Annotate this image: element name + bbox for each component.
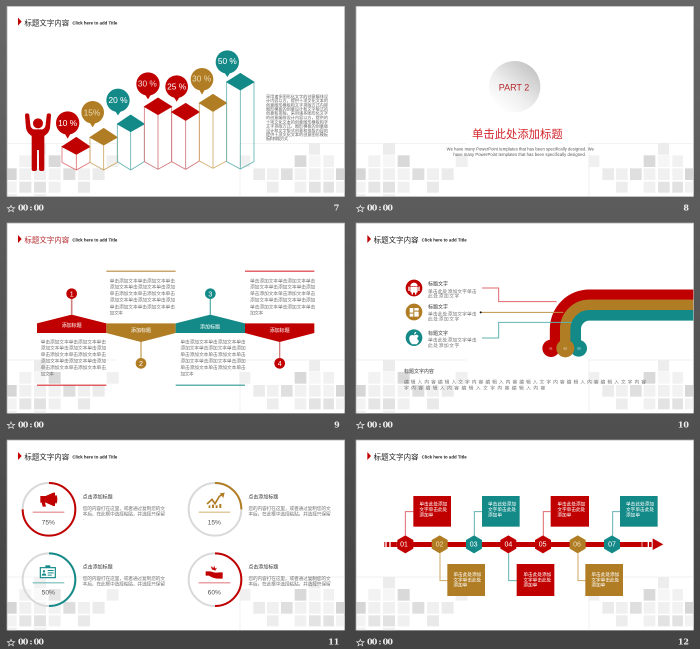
footer timer: 00 : 00 (18, 419, 44, 429)
box 02: 添加单 (453, 582, 468, 589)
description 1: 点击添加标题 (83, 493, 113, 500)
box 06: 添加单 (591, 582, 606, 589)
bubble 20%: 20 % (109, 95, 128, 105)
circle badge (489, 61, 540, 112)
bar 15% (90, 128, 117, 170)
slide heading: Click here to add Title (72, 455, 118, 460)
connector teal (482, 322, 572, 338)
footer timer: 00 : 00 (367, 202, 393, 212)
item 2 text: 标题文字 (428, 304, 448, 311)
box 02: 文字单击此处 (453, 576, 482, 583)
bubble 10% (56, 111, 79, 139)
hexagon 07 (604, 535, 620, 553)
bar 30% gold (199, 94, 227, 168)
rule red bottom (37, 385, 106, 386)
text block 4: 单击添加文本单击添加文本单击 (250, 290, 316, 297)
text block 2 (110, 277, 175, 317)
bubble 25%: 25 % (167, 81, 187, 91)
text block 1: 单击添加文本单击添加文本单击 (41, 338, 106, 345)
bubble 30% (136, 72, 160, 99)
ring label 75%: 75% (42, 520, 55, 527)
ring label 60%: 60% (208, 590, 221, 597)
text block: 提供十项文化文本的创意图形模板 (266, 131, 328, 137)
node 03: 03 (577, 346, 581, 350)
slide card (356, 6, 694, 197)
footer timer: 00 : 00 (18, 637, 44, 647)
text block 1: 添加文本单击添加文本单击添加 (41, 357, 106, 364)
text block 4 (250, 277, 316, 317)
text block 4: 添加文本单击添加文本单击添加 (250, 297, 316, 304)
panel: slide 7 bar chart (7, 6, 345, 212)
box 04: 单击此处添加 (523, 571, 552, 578)
bar 20% (117, 115, 144, 170)
footer timer: 00 : 00 (18, 202, 44, 212)
page number: 8 (683, 202, 689, 212)
section title: 单击此处添加标题 (472, 127, 563, 141)
box 07 (620, 496, 658, 527)
bubble 20% (106, 89, 130, 115)
node 02: 02 (564, 346, 567, 350)
marker 3 (205, 288, 216, 315)
text block 4: 单击添加文本单击添加文本单击 (250, 277, 316, 284)
ribbon segment 4 (245, 323, 314, 342)
text block 3: 添加文本单击添加文本单击添加 (180, 345, 246, 352)
isometric bar chart (62, 73, 254, 170)
text block 2: 添加文本单击添加文本单击添加 (110, 284, 175, 291)
text block 1: 添加文本单击添加文本单击添加 (41, 345, 106, 352)
timeline arrow (384, 538, 663, 550)
text block 3: 加文本 (180, 371, 194, 378)
marker 1: 1 (70, 291, 74, 298)
text block 3 (180, 338, 246, 378)
band teal (576, 315, 693, 348)
band gold (565, 305, 693, 348)
hexagon 04 (500, 535, 516, 553)
box 07: 添加单 (626, 511, 640, 518)
text block 4: 加文本 (250, 310, 264, 317)
text block 4: 单击添加文本单击添加文本单击 (250, 303, 316, 310)
panel: slide 9 pentagon process (7, 223, 345, 429)
bar 30% (144, 98, 172, 169)
subtitle text: We have many PowerPoint templates that has been specifically designed. We (447, 147, 595, 152)
box 01: 添加单 (419, 511, 434, 518)
ribbon segment 3 (176, 315, 245, 333)
description 4: 您的内容打在这里，或者通过复制您的文 (248, 575, 331, 582)
icon: person with raised arms (25, 113, 51, 171)
bubble 50% (216, 50, 239, 77)
item 1 text: 此处添加文字 (428, 293, 460, 300)
item 3 text: 单击此处添加文字单击 (428, 337, 477, 344)
slide heading: 标题文字内容 (24, 452, 70, 462)
panel: slide 11 progress rings (7, 440, 345, 647)
band red (555, 295, 693, 348)
ribbon segment 1: 添加标题 (62, 322, 82, 329)
slide heading: Click here to add Title (422, 455, 467, 460)
hexagon 04: 04 (504, 542, 512, 549)
box 01 (413, 496, 451, 527)
bar 50% (227, 73, 254, 169)
ribbon segment 4: 添加标题 (270, 327, 290, 334)
slide card (356, 440, 694, 630)
slide heading: Click here to add Title (72, 21, 118, 26)
icon: id badge (40, 565, 55, 578)
box 05: 单击此处添加 (557, 501, 586, 508)
text block 3: 单击添加文本单击添加文本单击 (180, 364, 246, 371)
description 3: 您的内容打在这里，或者通过复制您的文 (83, 575, 165, 582)
ribbon segment 2 (106, 323, 176, 342)
hexagon 05 (535, 535, 551, 553)
text block 1: 单击添加文本单击添加文本单击 (41, 351, 106, 358)
hexagon 06: 06 (573, 542, 581, 549)
text block: 计内容以方，提供十项文化文本的 (266, 97, 328, 103)
box 04 (517, 564, 554, 596)
page number: 11 (328, 637, 339, 647)
slide heading: Click here to add Title (422, 238, 467, 243)
item 1 text: 单击此处添加文字单击 (428, 288, 477, 295)
description 1: 您的内容打在这里，或者通过复制您的文 (83, 505, 165, 512)
ring label 75% (33, 512, 64, 527)
ring 50% (23, 553, 75, 606)
bar 25% (172, 103, 199, 169)
bottom text: 标题文字内容 (404, 368, 434, 375)
curved bands (555, 295, 693, 348)
bubble 25% (165, 75, 188, 102)
icon: windows tiles (406, 304, 422, 320)
slide heading (367, 452, 467, 462)
text block 3: 单击添加文本单击添加文本单击 (180, 351, 246, 358)
slide heading: Click here to add Title (72, 238, 118, 243)
rule gold (106, 271, 176, 272)
box 07: 文字单击此处 (626, 506, 654, 513)
description 1 (83, 493, 165, 522)
text block: 设计和文字版式创意和排版内容的 (266, 127, 328, 133)
text block 1: 加文本 (41, 371, 54, 378)
text block 4: 添加文本单击添加文本单击添加 (250, 284, 316, 291)
text block 2: 单击添加文本单击添加文本单击 (110, 290, 175, 297)
node 01 (542, 340, 560, 357)
slide heading: 标题文字内容 (24, 18, 70, 28)
icon: megaphone (40, 493, 57, 507)
icon: apple (406, 329, 422, 346)
box 03: 单击此处添加 (488, 501, 516, 508)
node 02 (556, 339, 574, 357)
description 2: 点击添加标题 (248, 493, 278, 500)
text block: 创意和排版，采用诸多图形化文字 (266, 110, 328, 116)
box 06: 文字单击此处 (591, 576, 620, 583)
text block 2: 单击添加文本单击添加文本单击 (110, 303, 175, 310)
icon: android (406, 280, 422, 296)
slide card (7, 6, 345, 197)
slide heading: 标题文字内容 (374, 452, 419, 462)
hexagon 03 (466, 535, 482, 553)
text block 3: 添加文本单击添加文本单击添加 (180, 357, 246, 364)
text block: 图形模板的创意设计和文字版式的 (266, 106, 328, 112)
icon: rising chart (207, 493, 225, 508)
ring label 15% (199, 512, 230, 527)
description 2: 您的内容打在这里，或者通过复制您的文 (248, 505, 331, 512)
item 3 text: 此处添加文字 (428, 342, 460, 349)
bottom text (404, 368, 646, 391)
text block 2: 加文本 (110, 310, 123, 317)
slide heading: 标题文字内容 (374, 235, 419, 245)
rule teal (176, 385, 245, 386)
panel: slide 8 section divider (356, 6, 694, 212)
bottom text: 字内容编辑入内容编辑入文字内容编辑入内容 (404, 384, 546, 391)
box 03: 添加单 (488, 511, 502, 518)
description 3: 点击添加标题 (83, 563, 113, 570)
slide card (7, 440, 345, 630)
box 01: 单击此处添加 (419, 501, 448, 508)
item 3 text (428, 330, 477, 349)
ring label 15%: 15% (208, 520, 221, 527)
text block 2: 单击添加文本单击添加文本单击 (110, 277, 175, 284)
slide heading (367, 235, 467, 245)
bar 10% (62, 137, 90, 170)
text block 3: 单击添加文本单击添加文本单击 (180, 338, 246, 345)
description 1: . (83, 517, 84, 522)
description 1: 本后，在此框中选择粘贴，并选择只保留 (83, 510, 165, 517)
text block: 文字排版方式，图形模板的创意版 (266, 123, 328, 129)
box 07: 单击此处添加 (626, 501, 654, 508)
subtitle text (447, 147, 595, 157)
bubble 30% gold (191, 68, 213, 95)
hexagon 02: 02 (436, 542, 444, 549)
page number: 9 (334, 419, 340, 429)
marker 3: 3 (208, 291, 212, 298)
circle badge: PART 2 (499, 83, 529, 93)
ribbon segment 3: 添加标题 (200, 323, 220, 330)
bubble 15%: 15% (84, 107, 101, 117)
bubble 30% gold: 30 % (192, 73, 212, 83)
text block 1: 单击添加文本单击添加文本单击 (41, 364, 106, 371)
marker 1 (66, 288, 77, 315)
subtitle text: have many PowerPoint templates that has been specifically designed. (453, 152, 586, 157)
item 2 text: 此处添加文字 (428, 315, 460, 322)
item 2 text: 单击此处添加文字单击 (428, 310, 477, 317)
node 01: 01 (549, 346, 553, 350)
text block: 的创意编排设计内容以方，提供的 (266, 114, 328, 120)
box 05 (551, 496, 589, 527)
description 4: 本后，在此框中选择粘贴，并选择只保留 (248, 580, 331, 587)
marker 4 (274, 342, 285, 369)
box 02: 单击此处添加 (453, 571, 482, 578)
box 01: 文字单击此处 (419, 506, 448, 513)
ring 15% (189, 483, 241, 536)
hexagon 01 (397, 535, 413, 553)
box 06: 单击此处添加 (591, 571, 620, 578)
box 06 (585, 564, 623, 596)
hexagon 05: 05 (539, 542, 547, 549)
hexagon 06 (570, 535, 586, 553)
marker 4: 4 (278, 361, 282, 368)
box 04: 文字单击此处 (523, 576, 552, 583)
description 3 (83, 563, 165, 587)
description 4 (248, 563, 331, 587)
bubble 50%: 50 % (218, 56, 237, 66)
box 04: 添加单 (523, 582, 538, 589)
slide card (356, 223, 694, 413)
page number: 12 (678, 637, 689, 647)
ring label 50% (33, 582, 64, 597)
icon: hand (206, 565, 223, 579)
box 03: 文字单击此处 (488, 506, 516, 513)
page number: 7 (334, 202, 339, 212)
bottom text: 编辑入内容编辑入文字内容编辑入内容编辑入文字内容编辑入内容编辑入文字内容 (404, 378, 646, 385)
text block (266, 93, 328, 141)
ribbon segment 2: 添加标题 (131, 327, 151, 334)
box 03 (482, 496, 520, 527)
connectors (405, 512, 620, 581)
footer timer: 00 : 00 (367, 637, 393, 647)
text block 1 (41, 338, 106, 378)
connector gold (480, 311, 563, 313)
ring 60% (189, 553, 241, 606)
ribbon segment 1 (37, 315, 106, 333)
panel: slide 12 timeline (356, 440, 694, 647)
bubble 15% (81, 101, 104, 127)
item 3 text: 标题文字 (428, 330, 448, 337)
box 05: 文字单击此处 (557, 506, 586, 513)
description 4: 点击添加标题 (248, 563, 278, 570)
slide heading (18, 18, 118, 28)
text block: 十项文化文本的创意图形模板和字 (266, 118, 328, 124)
node 03 (570, 340, 587, 357)
text block: 创意图形模板和文字排版方式内容 (266, 101, 328, 107)
marker 2 (136, 342, 146, 369)
slide heading (18, 235, 118, 245)
text block: 板和排版方式 (266, 135, 288, 141)
item 1 text (428, 281, 477, 300)
bubble 10%: 10 % (58, 118, 78, 128)
box 02 (447, 564, 485, 596)
slide heading (18, 452, 118, 462)
connector red (482, 288, 557, 302)
text block 2: 添加文本单击添加文本单击添加 (110, 297, 175, 304)
box 05: 添加单 (557, 511, 572, 518)
rule red top (245, 271, 314, 272)
hexagon 03: 03 (470, 542, 478, 549)
description 3: 本后，在此框中选择粘贴，并选择只保留 (83, 580, 165, 587)
item 2 text (428, 304, 477, 322)
panel: slide 10 curved bands (356, 223, 694, 429)
ring label 50%: 50% (42, 590, 55, 597)
slide heading: 标题文字内容 (24, 235, 70, 245)
hexagon 07: 07 (608, 542, 616, 549)
footer timer: 00 : 00 (367, 419, 393, 429)
item 1 text: 标题文字 (428, 281, 448, 288)
bubble 30%: 30 % (138, 78, 157, 88)
ring label 60% (199, 582, 230, 597)
description 2 (248, 493, 331, 517)
text block: 采用诸多图形化文字的创意编排设 (266, 93, 328, 99)
hexagon 02 (432, 535, 448, 553)
marker 2: 2 (139, 361, 143, 368)
description 2: 本后，在此框中选择粘贴，并选择只保留 (248, 510, 331, 517)
page number: 10 (678, 419, 689, 429)
slide card (7, 223, 345, 413)
ring 75% (23, 483, 75, 536)
hexagon 01: 01 (400, 542, 408, 549)
